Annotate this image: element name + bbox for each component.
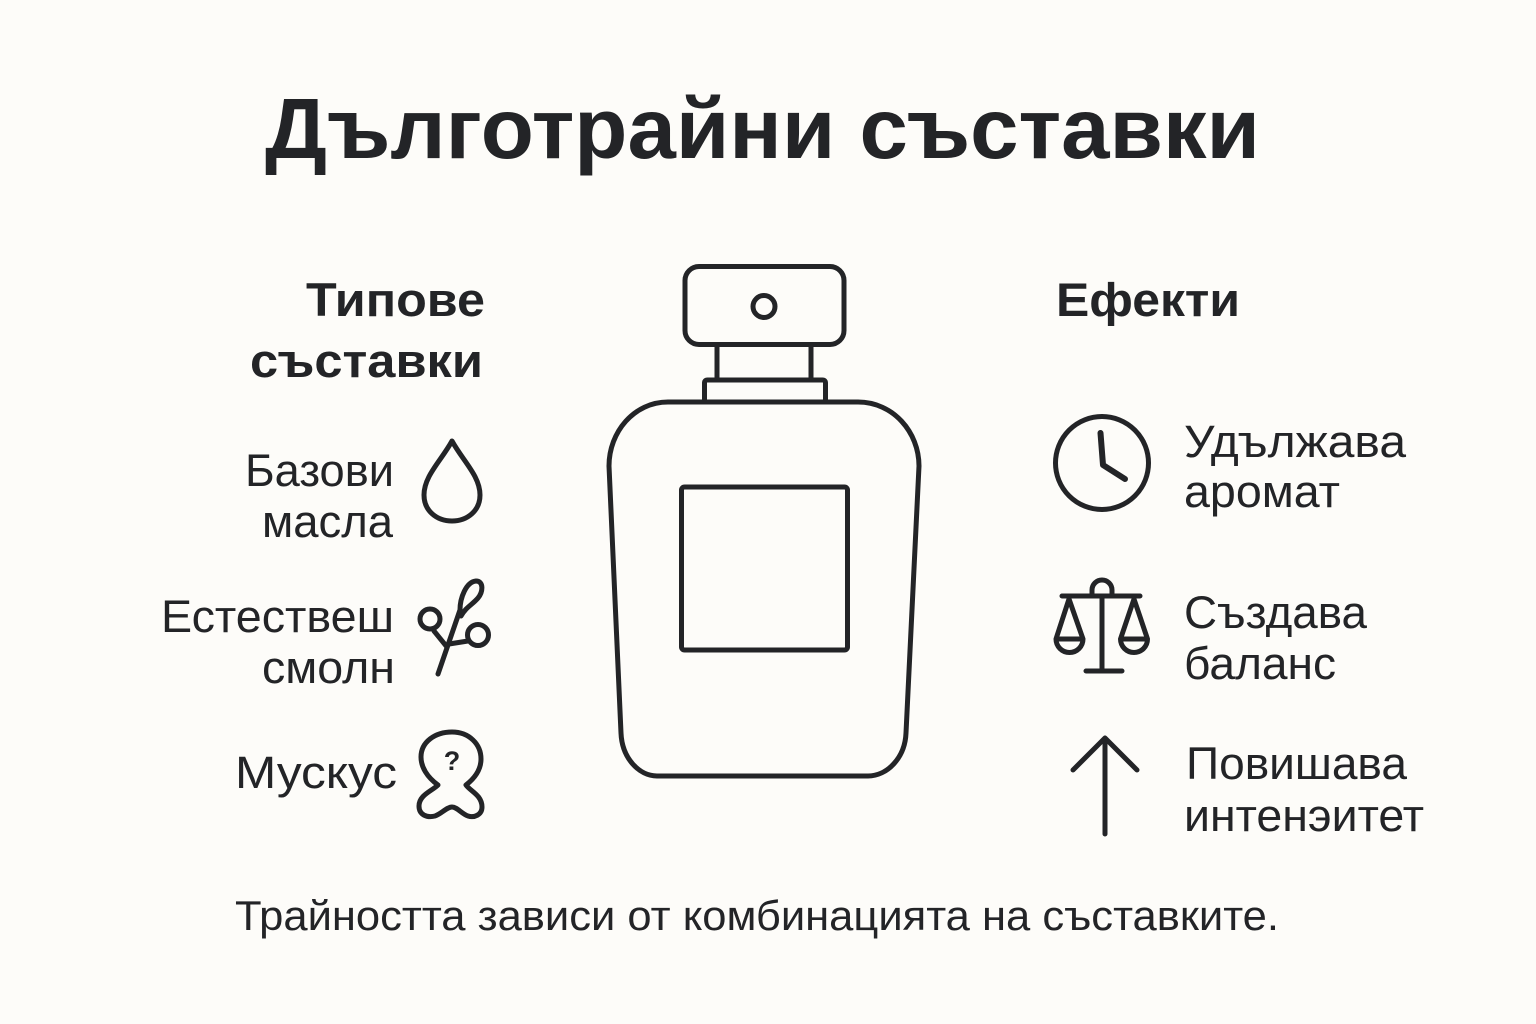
label: musk: Мускус bbox=[235, 747, 397, 798]
panel: ingredient types bbox=[161, 273, 488, 817]
bottle body bbox=[609, 402, 919, 776]
label: increases intensity bbox=[1184, 738, 1424, 841]
label: natural resins bbox=[161, 591, 395, 693]
icon: up arrow bbox=[1073, 738, 1137, 834]
label: prolongs scent bbox=[1184, 416, 1407, 517]
footer note: Трайността зависи от комбинацията на съставките. bbox=[235, 892, 1279, 939]
blank label bbox=[682, 487, 848, 650]
icon: resin sprig bbox=[420, 581, 488, 674]
label: creates balance: баланс bbox=[1184, 638, 1336, 689]
label: creates balance: Създава bbox=[1184, 587, 1368, 638]
heading: ingredient types bbox=[250, 273, 485, 387]
heading: ingredient types: Типове bbox=[306, 273, 485, 326]
label: creates balance bbox=[1184, 587, 1368, 689]
label: increases intensity: интенэитет bbox=[1184, 790, 1424, 841]
label: natural resins: смолн bbox=[262, 642, 395, 693]
label: increases intensity: Повишава bbox=[1186, 738, 1408, 789]
icon: clock bbox=[1056, 416, 1148, 510]
icon: musk pod: ? bbox=[444, 746, 460, 776]
label: prolongs scent: аромат bbox=[1184, 466, 1340, 517]
bottle neck bbox=[717, 345, 811, 378]
icon: balance scales bbox=[1056, 580, 1148, 671]
heading: ingredient types: съставки bbox=[250, 334, 483, 387]
label: base oils: Базови bbox=[245, 445, 394, 496]
icon: perfume bottle bbox=[609, 266, 919, 776]
heading: effects: Ефекти bbox=[1056, 273, 1240, 326]
spray nozzle bbox=[753, 296, 775, 318]
label: base oils bbox=[245, 445, 394, 547]
bottle collar bbox=[704, 380, 826, 400]
label: natural resins: Естествеш bbox=[161, 591, 394, 642]
label: prolongs scent: Удължава bbox=[1184, 416, 1407, 467]
bottle cap bbox=[685, 266, 844, 344]
icon: musk pod bbox=[419, 732, 482, 817]
title: Дълготрайни съставки bbox=[265, 82, 1260, 177]
label: base oils: масла bbox=[262, 496, 394, 547]
panel: effects bbox=[1056, 273, 1424, 841]
icon: oil drop bbox=[424, 441, 480, 521]
